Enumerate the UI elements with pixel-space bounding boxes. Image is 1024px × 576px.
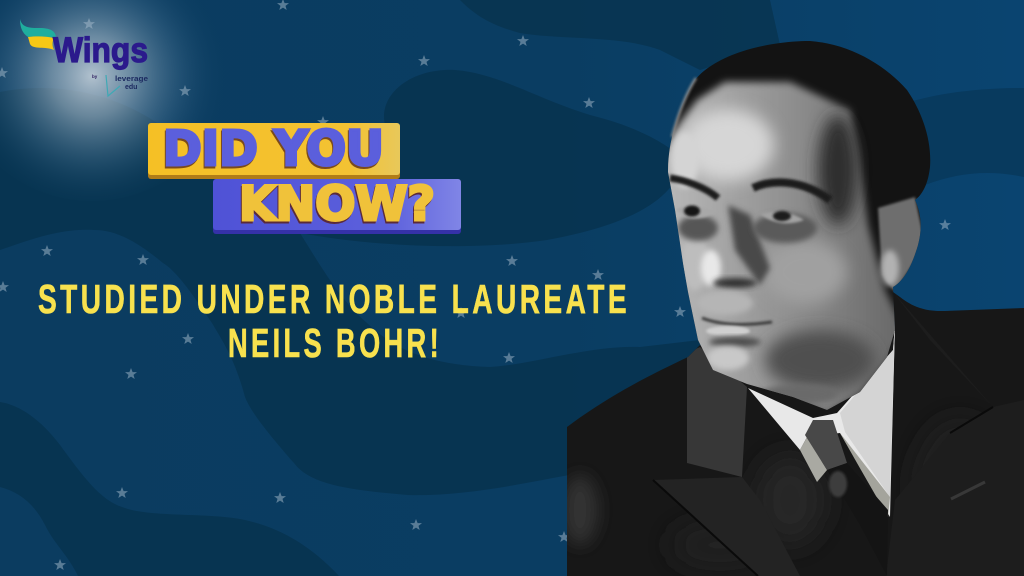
right eye	[760, 212, 804, 223]
logo wordmark: Wings	[53, 31, 148, 70]
yellow box	[148, 123, 400, 179]
suit	[560, 290, 1024, 576]
right cheek	[763, 240, 847, 304]
head: hair, face and ear	[668, 41, 930, 410]
leverage edu wordmark: leverage	[115, 74, 148, 83]
lower lapel edge	[653, 477, 800, 576]
forehead light	[682, 109, 774, 181]
shirt	[748, 325, 895, 517]
nose bridge shade	[728, 205, 770, 285]
jaw shadow	[765, 330, 875, 390]
right lapel	[899, 413, 1021, 574]
icon: check mark	[106, 75, 120, 96]
fact line 1: STUDIED UNDER NOBLE LAUREATE	[38, 276, 630, 322]
tie	[805, 420, 888, 576]
heading: did you: DID YOU	[162, 123, 383, 179]
hair highlight	[672, 78, 696, 137]
eye sockets	[678, 215, 718, 241]
left eye	[678, 208, 710, 220]
fact line 2: NEILS BOHR!	[228, 320, 442, 366]
soft face tone	[655, 82, 905, 415]
moustache area	[697, 291, 753, 315]
portrait	[560, 35, 1024, 576]
heading: did you: DID YOU	[163, 121, 384, 177]
pocket slit	[951, 482, 985, 499]
left lapel	[687, 347, 747, 477]
right forehead shade	[818, 115, 858, 225]
left cheek	[680, 241, 707, 289]
by label: by	[92, 74, 98, 79]
glow behind logo	[0, 0, 227, 201]
ear	[878, 197, 925, 292]
icon: yellow flag	[28, 36, 54, 50]
chin	[707, 346, 749, 370]
edu label: edu	[125, 84, 137, 91]
heading: know: KNOW?	[238, 179, 434, 234]
icon: teal flag	[20, 19, 56, 38]
mouth	[702, 318, 772, 324]
eyebrows	[670, 178, 718, 198]
nose underside	[713, 278, 757, 288]
fact text	[38, 276, 630, 366]
nose tip highlight	[701, 250, 721, 286]
blue box	[213, 179, 461, 234]
neck under chin	[762, 384, 838, 404]
badge: did you know	[148, 121, 461, 234]
heading: know: KNOW?	[239, 177, 435, 232]
logo: Wings by leverage edu	[20, 19, 148, 96]
